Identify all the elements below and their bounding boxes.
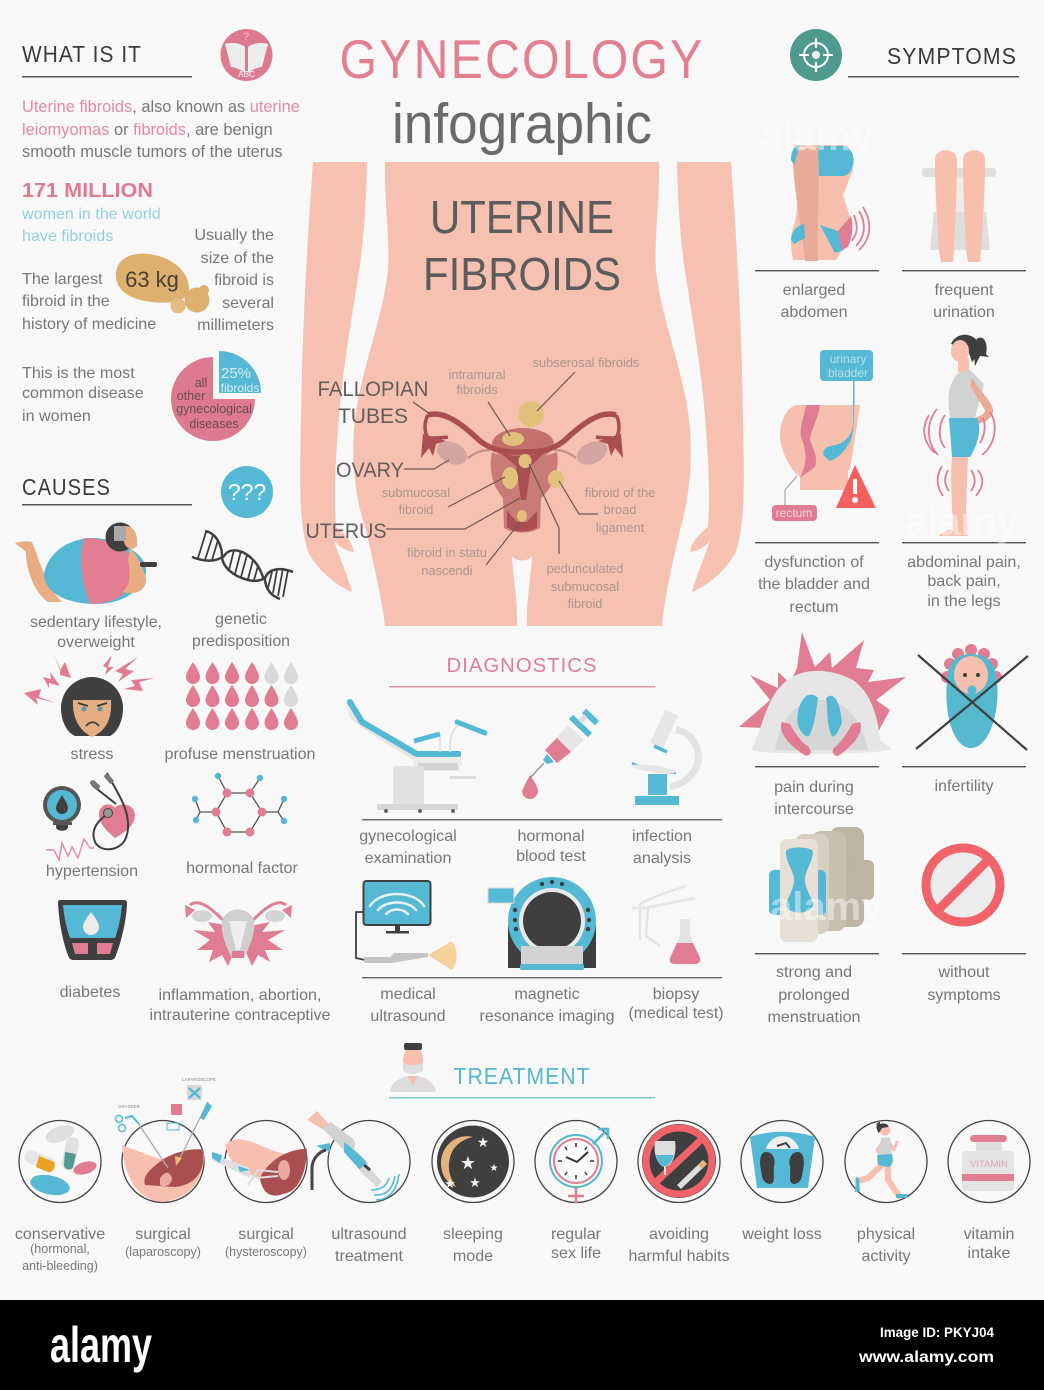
title: GYNECOLOGY <box>340 28 704 90</box>
icon: gynecological chair <box>346 700 485 813</box>
text: profuse menstruation: profuse menstruation <box>164 745 316 763</box>
stat: 171 million <box>21 180 161 245</box>
icon: regular sex life <box>550 1129 608 1203</box>
text: diabetes: diabetes <box>60 983 120 1001</box>
text: treatment labels: conservative <box>15 1225 105 1243</box>
icon: weight loss scale <box>750 1132 815 1188</box>
pie chart: 25% fibroids: other <box>177 389 205 403</box>
uterus labels: fibroid <box>399 502 433 517</box>
text: diagnostics row 1: examination <box>365 849 451 867</box>
icon: stress head <box>24 655 155 737</box>
text block: definition: leiomyomas or fibroids, are benign <box>22 121 273 139</box>
text: symptoms row 2: in the legs <box>927 592 1001 610</box>
text: treatment labels: ultrasound <box>331 1225 407 1243</box>
icon: infertility baby <box>916 644 1028 750</box>
uterus labels: OVARY <box>336 459 404 482</box>
icon: physical activity <box>855 1122 908 1198</box>
icon: syringe <box>522 711 597 799</box>
text block: definition: smooth muscle tumors of the uterus <box>22 143 283 161</box>
icon: sleeping mode: ★ <box>444 1176 456 1191</box>
text: symptoms row 3: pain during <box>774 778 854 796</box>
text: diagnostics row 1: analysis <box>633 849 691 867</box>
text: symptoms row 1: urination <box>933 303 995 321</box>
text: diagnostics row 2: (medical test) <box>628 1004 724 1022</box>
uterus labels: subserosal fibroids <box>533 355 639 370</box>
text block: definition: Uterine fibroids, also known as uterine <box>22 98 300 116</box>
icon: 63 kg fibroid blob <box>116 254 210 314</box>
text: symptoms row 2: abdominal pain, <box>907 553 1021 571</box>
icon: laparoscopy <box>116 1077 216 1202</box>
text block: definition <box>22 98 300 161</box>
fibroid nodules <box>502 401 564 522</box>
icon: laparoscopy: LAPAROSCOPE <box>182 1077 216 1082</box>
footer bar <box>0 1300 1044 1390</box>
text: genetic predisposition <box>192 610 290 650</box>
heading: treatment <box>389 1043 655 1098</box>
text: symptoms row 4 <box>767 963 1001 1026</box>
text: symptoms row 4: without <box>938 963 990 981</box>
icon: DNA <box>192 531 293 599</box>
uterus labels: ligament <box>596 520 645 535</box>
uterus labels: submucosal <box>382 485 450 500</box>
text: treatment labels: weight loss <box>741 1225 822 1243</box>
uterus labels <box>306 355 655 611</box>
text: treatment labels: surgical <box>135 1225 191 1243</box>
watermarks: alamy <box>760 115 874 159</box>
pie chart: 25% fibroids: gynecological <box>176 402 252 416</box>
heading: symptoms: SYMPTOMS <box>887 43 1017 69</box>
title <box>340 28 704 156</box>
icon: bladder and rectum: urinary <box>830 352 866 366</box>
text: hormonal factor: hormonal factor <box>186 859 299 877</box>
icon: bladder and rectum: rectum <box>776 506 812 520</box>
uterus labels: UTERUS <box>306 520 386 543</box>
text: inflammation <box>150 986 331 1024</box>
icon: 63 kg fibroid blob: 63 kg <box>125 267 179 292</box>
pie chart: 25% fibroids: 25% <box>221 365 251 382</box>
icon: pills <box>23 1122 98 1198</box>
icon: sleeping mode: ★ <box>477 1134 489 1150</box>
text: treatment labels <box>15 1225 1014 1273</box>
panel: body silhouette <box>300 162 744 626</box>
text: symptoms row 2: rectum <box>789 598 839 616</box>
heading: uterine fibroids: FIBROIDS <box>423 248 621 300</box>
icon: biopsy <box>632 886 700 964</box>
text: treatment labels: treatment <box>335 1247 404 1265</box>
heading: treatment: TREATMENT <box>454 1063 590 1089</box>
icon: hypertension <box>43 773 135 860</box>
icon: blood drops <box>186 662 298 730</box>
text: largest fibroid <box>22 270 156 333</box>
uterus labels: nascendi <box>421 563 473 578</box>
icon: frequent urination <box>922 150 996 262</box>
text: treatment labels: sex life <box>551 1244 601 1262</box>
heading: causes: CAUSES <box>22 474 111 500</box>
icon: diabetes meter <box>58 900 127 960</box>
text: sedentary: overweight <box>57 633 135 651</box>
icon: abdominal pain figure <box>924 335 995 536</box>
text: treatment labels: harmful habits <box>628 1247 730 1265</box>
text: treatment labels: intake <box>968 1244 1011 1262</box>
uterus labels: pedunculated <box>547 561 623 576</box>
text: most common disease <box>22 364 144 425</box>
icon: inflamed uterus <box>185 903 292 966</box>
text: treatment labels: anti-bleeding) <box>22 1259 98 1273</box>
text: largest fibroid: The largest <box>22 270 103 288</box>
text: hypertension: hypertension <box>46 862 138 880</box>
text: diagnostics row 2 <box>370 985 724 1025</box>
text: usually the size: several <box>222 294 274 312</box>
text: usually the size: Usually the <box>194 226 274 244</box>
text: diagnostics row 2: magnetic <box>514 985 580 1003</box>
text: inflammation: intrauterine contraceptive <box>150 1006 331 1024</box>
treatment circles <box>19 1120 1030 1202</box>
pie chart: 25% fibroids: diseases <box>189 417 239 431</box>
icon: book: ABC <box>238 70 255 79</box>
text: diagnostics row 1 <box>359 827 692 867</box>
text: symptoms row 4: symptoms <box>927 986 1001 1004</box>
watermarks: alamy <box>905 500 1019 544</box>
pie chart: 25% fibroids <box>171 351 261 441</box>
uterus labels: fibroid of the <box>585 485 655 500</box>
text: sedentary: sedentary lifestyle, <box>30 613 162 631</box>
heading: what is it: WHAT IS IT <box>22 41 142 67</box>
title: infographic <box>392 92 652 156</box>
text: diagnostics row 1: hormonal <box>517 827 585 845</box>
text: genetic predisposition: genetic <box>215 610 267 628</box>
text: symptoms row 2: dysfunction of <box>764 553 864 571</box>
icon: sleeping mode <box>437 1126 509 1198</box>
text: diagnostics row 1: infection <box>632 827 692 845</box>
icon: book <box>220 29 272 81</box>
uterus labels: TUBES <box>338 405 408 428</box>
text: symptoms row 2: the bladder and <box>758 575 870 593</box>
uterus diagram <box>386 372 623 565</box>
text: treatment labels: mode <box>453 1247 493 1265</box>
uterus labels: fibroids <box>456 382 498 397</box>
icon: no symptoms <box>926 848 1000 922</box>
text: most common disease: This is the most <box>22 364 135 382</box>
text: symptoms row 1: enlarged <box>783 281 845 299</box>
icon: enlarged abdomen <box>791 145 869 261</box>
icon: MRI scanner <box>488 877 596 970</box>
text: treatment labels: surgical <box>238 1225 294 1243</box>
text: usually the size: fibroid is <box>214 271 274 289</box>
icon: avoiding harmful habits <box>642 1124 716 1198</box>
text: diagnostics row 2: resonance imaging <box>480 1007 614 1025</box>
text: symptoms row 4: menstruation <box>767 1008 861 1026</box>
watermarks <box>760 115 1019 929</box>
icon: overweight person <box>15 522 157 604</box>
icon: laparoscopy: GRASPER <box>118 1104 141 1109</box>
text: largest fibroid: history of medicine <box>22 315 156 333</box>
icon: hysteroscopy <box>212 1139 307 1196</box>
icon: vitamin <box>962 1135 1014 1191</box>
stat: 171 million: women in the world <box>21 205 161 223</box>
icon: book: ? <box>243 31 249 43</box>
footer bar: www.alamy.com <box>858 1349 994 1366</box>
uterus labels: fibroid in statu <box>407 545 487 560</box>
text: largest fibroid: fibroid in the <box>22 292 110 310</box>
text: symptoms row 4: strong and <box>776 963 852 981</box>
stress bolts <box>24 655 155 705</box>
text: inflammation: inflammation, abortion, <box>158 986 322 1004</box>
text: most common disease: in women <box>22 407 91 425</box>
text: treatment labels: (hormonal, <box>30 1242 90 1256</box>
icon: sleeping mode: ★ <box>469 1175 481 1190</box>
icon: ultrasound treatment <box>307 1111 399 1200</box>
icon: target <box>790 29 842 81</box>
icon: sanitary pads <box>769 827 874 942</box>
text: diagnostics row 2: ultrasound <box>370 1007 446 1025</box>
icon: sleeping mode: ★ <box>490 1163 499 1174</box>
uterus labels: FALLOPIAN <box>318 378 428 401</box>
text: stress: stress <box>71 745 113 763</box>
text: symptoms row 1 <box>780 281 995 321</box>
text: diagnostics row 1: gynecological <box>359 827 457 845</box>
icon: hormone molecule <box>192 773 287 836</box>
text: treatment labels: sleeping <box>443 1225 503 1243</box>
text: treatment labels: (laparoscopy) <box>125 1245 201 1259</box>
text: genetic predisposition: predisposition <box>192 632 290 650</box>
text: diagnostics row 2: medical <box>380 985 436 1003</box>
text: symptoms row 2: back pain, <box>927 572 1001 590</box>
uterus labels: broad <box>604 502 636 517</box>
text: usually the size: size of the <box>201 249 274 267</box>
icon: vitamin: VITAMIN <box>970 1159 1008 1170</box>
text: treatment labels: vitamin <box>964 1225 1014 1243</box>
uterus labels: fibroid <box>568 596 602 611</box>
text: symptoms row 3: intercourse <box>774 800 854 818</box>
text: symptoms row 4: prolonged <box>778 986 850 1004</box>
text: symptoms row 3: infertility <box>934 777 994 795</box>
uterus labels: intramural <box>449 367 505 382</box>
icon: ultrasound <box>356 881 456 970</box>
heading: uterine fibroids <box>423 191 621 300</box>
text: diagnostics row 2: biopsy <box>653 985 700 1003</box>
footer bar: Image ID: PKYJ04 <box>880 1324 994 1340</box>
text: sedentary <box>30 613 162 651</box>
heading: uterine fibroids: UTERINE <box>430 191 614 243</box>
icon: question marks <box>221 466 273 518</box>
icon: bladder and rectum <box>772 350 876 521</box>
text: symptoms row 1: abdomen <box>780 303 848 321</box>
text: usually the size <box>194 226 274 334</box>
text: symptoms row 1: frequent <box>934 281 994 299</box>
pie chart: 25% fibroids: fibroids <box>221 381 259 395</box>
text: diagnostics row 1: blood test <box>516 847 586 865</box>
uterus labels: submucosal <box>551 579 619 594</box>
icon: sleeping mode: ★ <box>460 1153 476 1173</box>
stat: 171 million: have fibroids <box>22 227 113 245</box>
text: most common disease: common disease <box>22 384 144 402</box>
pie chart: 25% fibroids: all <box>195 376 207 390</box>
icon: microscope <box>632 710 698 805</box>
text: treatment labels: activity <box>861 1247 912 1265</box>
icon: pain during intercourse <box>739 632 906 756</box>
icon: bladder and rectum: bladder <box>828 366 868 380</box>
text: treatment labels: (hysteroscopy) <box>225 1245 307 1259</box>
watermarks: alamy <box>770 885 884 929</box>
text: treatment labels: avoiding <box>649 1225 709 1243</box>
text: treatment labels: regular <box>551 1225 602 1243</box>
footer bar: alamy <box>50 1317 152 1373</box>
icon: question marks: ??? <box>228 479 266 505</box>
stat: 171 million: 171 MILLION <box>22 180 153 202</box>
text: usually the size: millimeters <box>197 316 274 334</box>
text: symptoms row 2 <box>758 553 1021 616</box>
text: treatment labels: physical <box>857 1225 915 1243</box>
text: symptoms row 3 <box>774 777 994 818</box>
heading: diagnostics: DIAGNOSTICS <box>446 655 598 677</box>
